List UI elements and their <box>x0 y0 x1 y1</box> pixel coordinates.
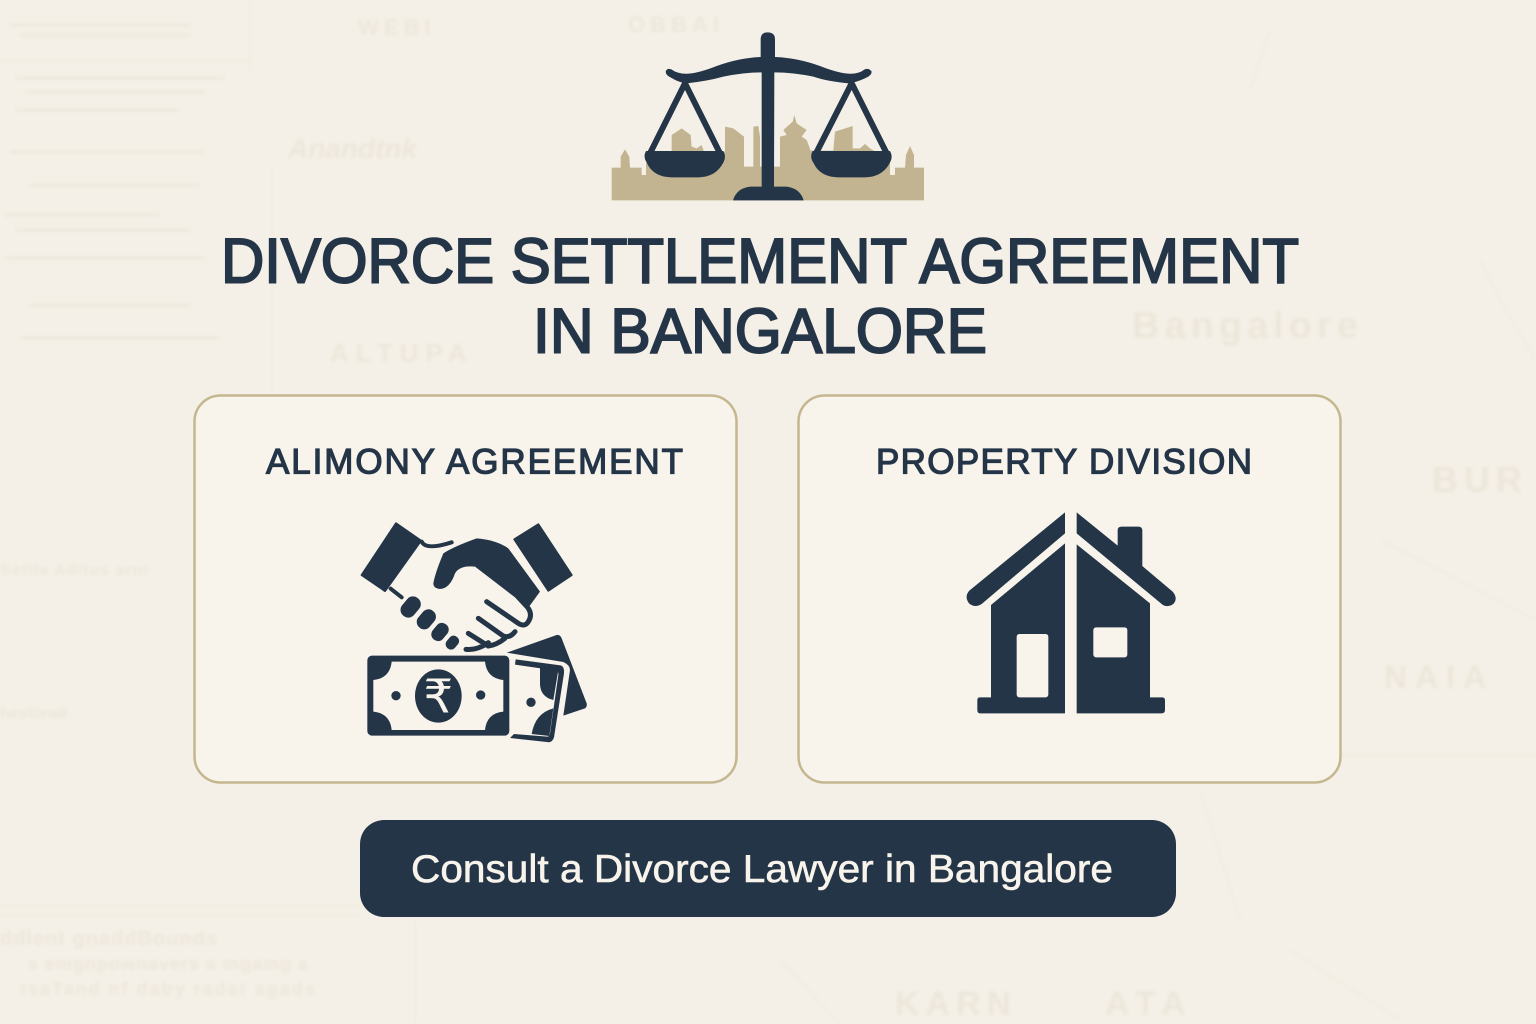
panel: property division <box>798 396 1340 782</box>
background: faint map and document texture: tsaTand nf daby radat agads <box>20 979 317 999</box>
background: faint map and document texture: ALTUPA <box>330 338 474 368</box>
background: faint map and document texture: ATA <box>1105 985 1194 1023</box>
heading: alimony agreement: ALIMONY AGREEMENT <box>266 443 683 482</box>
background: faint map and document texture: OBBAI <box>628 12 724 37</box>
right roof with chimney <box>1077 512 1176 606</box>
front rupee note <box>367 656 509 736</box>
background: faint map and document texture: s emgnpownavers a mgamg a <box>28 954 309 974</box>
left half with door <box>977 543 1065 713</box>
call to action button <box>360 820 1176 917</box>
background: faint map and document texture: WEBI <box>358 15 435 40</box>
title: DIVORCE SETTLEMENT AGREEMENT <box>221 226 1299 296</box>
back rupee note <box>507 635 587 716</box>
title <box>221 226 1299 366</box>
icon: handshake over rupee notes <box>362 523 587 742</box>
background: faint map and document texture: Settle Aditus arnl <box>0 562 149 579</box>
left roof <box>967 512 1065 606</box>
background: faint map and document texture: KARN <box>895 985 1017 1023</box>
middle rupee note <box>510 659 564 742</box>
background: faint map and document texture: ddlent gnaddBounds <box>0 928 218 950</box>
title: IN BANGALORE <box>533 296 987 366</box>
background: faint map and document texture: Bangalore <box>1132 305 1363 347</box>
right cuff <box>514 524 572 591</box>
background: faint map and document texture: BUR <box>1432 459 1528 500</box>
panel: alimony agreement <box>194 396 736 782</box>
left hand fingers <box>398 593 461 652</box>
icon: house split in two <box>967 512 1176 713</box>
icon: scales of justice over Bangalore skyline <box>612 32 924 200</box>
right hand <box>433 538 540 610</box>
background: faint map and document texture: hestorad <box>0 705 68 722</box>
right pan <box>811 83 892 177</box>
background: faint map and document texture: NAIA <box>1384 659 1494 695</box>
scale stand and beam <box>666 32 872 200</box>
left pan <box>644 83 725 177</box>
heading: property division: PROPERTY DIVISION <box>876 443 1252 482</box>
background: faint map and document texture: Anandtnk <box>287 133 419 164</box>
call to action button: Consult a Divorce Lawyer in Bangalore <box>411 848 1113 891</box>
skyline silhouette <box>612 115 924 200</box>
rupee symbol: ₹ <box>423 671 453 725</box>
right half with window <box>1077 544 1165 713</box>
left cuff <box>362 523 421 591</box>
